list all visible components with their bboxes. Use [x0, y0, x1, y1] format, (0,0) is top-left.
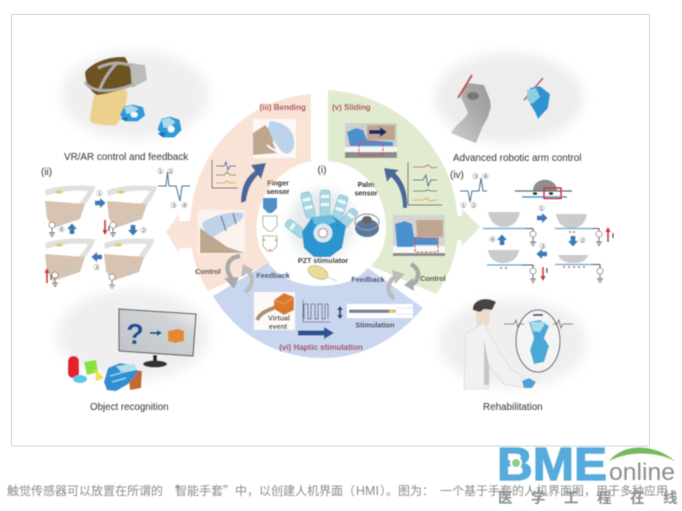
icon: PZT disc [306, 263, 337, 282]
arrow: control right [404, 264, 418, 291]
heading: Rehabilitation: Rehabilitation [483, 402, 543, 413]
label: PZT stimulator: PZT stimulator [298, 256, 348, 265]
control and feedback, right [351, 264, 446, 299]
panel: (iv) palm sensing cycle: ④ [489, 235, 496, 244]
icon: head with VR headset [85, 57, 147, 125]
panel: (ii) finger sensing cycle: I [108, 226, 110, 233]
label: finger sensor: sensor [267, 189, 290, 196]
heading: Advanced robotic arm control: Advanced robotic arm control [453, 153, 581, 164]
caption: HMI [356, 484, 379, 498]
arrow: vertical double arrow [337, 306, 343, 319]
icon: sensor cross-section [515, 180, 572, 198]
image: sliding photo bottom [393, 215, 445, 256]
label: palm sensor: Palm [358, 182, 374, 189]
chart: pulse train [303, 300, 330, 322]
chart: signal waveform right [460, 172, 489, 210]
heading: (iii) Bending: (iii) Bending [260, 103, 306, 112]
label: Feedback right: Feedback [351, 275, 385, 284]
icon: gloved hand grasping cube [104, 363, 142, 391]
panel: (ii) finger sensing cycle [41, 167, 190, 288]
arrow: control left [224, 256, 240, 289]
caption: ）。图为： [380, 482, 434, 499]
caption: 中，以创建人机界面 [235, 482, 343, 499]
icon: monitor: ? [126, 319, 144, 351]
caption: ” [223, 482, 235, 499]
chart: signal waveform right: ④ [482, 172, 489, 181]
chart: bending signals [212, 160, 238, 188]
label: Feedback left: Feedback [256, 271, 290, 280]
logo: BME online: BME [497, 438, 607, 490]
image: virtual event: event [269, 324, 288, 331]
panel: rehabilitation [439, 299, 587, 413]
panel: (ii) finger sensing cycle: ② [140, 226, 147, 235]
chart: signal waveform right: ③ [472, 172, 479, 181]
icon: oval with hand figure [504, 310, 573, 372]
image: straight finger bottom [198, 210, 245, 254]
logo: BME online: online [609, 459, 675, 486]
icon: objects [68, 356, 104, 383]
image: sliding photo top [345, 123, 397, 158]
panel: advanced robotic arm control [435, 53, 583, 164]
arrow: peach output arrow [166, 214, 200, 253]
panel: (ii) finger sensing cycle: ③ [93, 263, 100, 272]
panel: (iv) palm sensing cycle: ③ [539, 242, 546, 251]
image: stimulation strip [347, 304, 413, 318]
heading: (v) Sliding: (v) Sliding [332, 103, 371, 112]
caption: 一个基于手套的人机界面图，用于多种应用 [440, 482, 668, 499]
panel: (ii) finger sensing cycle: ① [96, 189, 103, 198]
caption: “ [168, 482, 180, 499]
image: virtual event: Virtual [268, 316, 290, 322]
chart: signal waveform left: ① [157, 167, 164, 176]
label: Control right: Control [420, 274, 446, 283]
label: palm sensor: sensor [355, 190, 378, 198]
panel: (vi) haptic stimulation sector [213, 263, 423, 358]
icon: robotic glove with stick [524, 78, 550, 119]
caption: 智能手套 [175, 482, 223, 499]
label: finger sensor: Finger [267, 180, 289, 188]
panel: (ii) finger sensing cycle: I [50, 275, 52, 282]
chart: signal waveform left: ③ [170, 201, 177, 210]
label: (iv): (iv) [450, 170, 464, 181]
panel: (iv) palm sensing cycle: I [612, 233, 614, 240]
chart: signal waveform left [157, 167, 190, 210]
panel: (iv) palm sensing cycle: ② [579, 236, 586, 245]
caption: （ [343, 482, 355, 499]
icon: finger sensors [263, 198, 277, 251]
chart: signal waveform left: ④ [181, 201, 188, 210]
icon: glove with PZT stimulator [284, 190, 359, 257]
chart: signal waveform left: ② [167, 167, 174, 176]
panel: (i) central glove [263, 165, 379, 282]
arrow: feedback left [241, 264, 254, 292]
icon: glove left [120, 104, 145, 122]
logo: BME online [497, 438, 682, 508]
arrow: sliding curved arrow [384, 168, 407, 208]
arrow: bending curved arrow [241, 163, 266, 203]
icon: palm sensor [355, 214, 379, 237]
caption: 触觉传感器可以放置在所谓的 [7, 482, 163, 499]
panel: VR/AR control and feedback [61, 51, 209, 163]
image: virtual event [254, 292, 295, 331]
panel: (ii) finger sensing cycle: ④ [58, 225, 65, 234]
chart: sliding signals [408, 162, 442, 205]
icon: glove right [157, 116, 182, 138]
image: bent finger top [253, 119, 296, 158]
panel: object recognition [57, 290, 209, 413]
arrow: feedback right [388, 270, 405, 299]
label: (ii): (ii) [41, 167, 52, 178]
label: (i): (i) [318, 165, 326, 176]
panel: (iv) palm sensing cycle: ① [538, 204, 545, 213]
label: Stimulation: Stimulation [355, 320, 395, 330]
icon: monitor [119, 309, 196, 368]
arrow: green output arrow [445, 209, 480, 246]
panel: sliding sector [328, 90, 458, 294]
heading: Object recognition: Object recognition [90, 402, 169, 413]
panel: bending sector [190, 94, 311, 291]
arrow: stimulus arrow [298, 327, 334, 339]
label: Control left: Control [195, 267, 221, 276]
icon: person [464, 299, 536, 389]
page frame [12, 14, 650, 446]
icon: human hand with stick [451, 75, 491, 143]
chart: signal waveform right: ② [470, 201, 477, 210]
panel: (iv) palm sensing cycle [450, 170, 614, 282]
chart: signal waveform right: ① [460, 201, 467, 210]
panel: (iv) palm sensing cycle: I [546, 268, 548, 275]
heading: (vi) Haptic stimulation: (vi) Haptic stimulation [279, 343, 363, 352]
control and feedback, left [195, 256, 290, 292]
heading: VR/AR control and feedback: VR/AR control and feedback [64, 152, 188, 163]
